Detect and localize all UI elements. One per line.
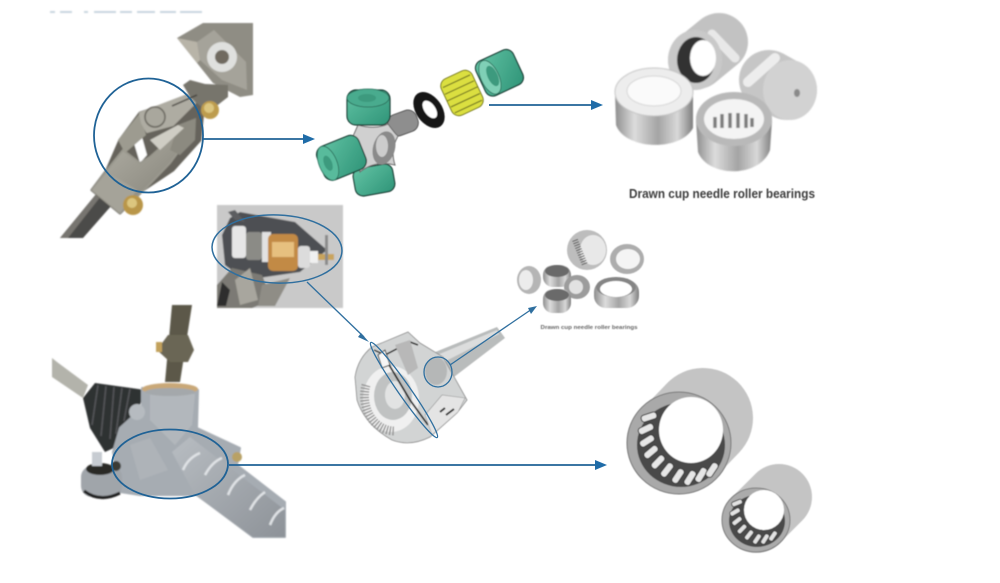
photo: large needle bearing: [627, 392, 731, 494]
photo: small bearing group: [517, 230, 644, 313]
joint silhouette: [92, 97, 203, 213]
housing: [355, 332, 467, 443]
shaft: [423, 327, 505, 380]
bore: [659, 397, 723, 463]
front bearing: [696, 92, 772, 171]
caption: large: Drawn cup needle roller bearings: [629, 187, 815, 201]
diagram: exploded universal joint cross: [313, 47, 526, 197]
callout ellipse: rack housing: [112, 430, 228, 498]
left bearing: [615, 68, 693, 145]
arrow: cross to bearings: [489, 100, 603, 110]
cup body: [679, 418, 703, 443]
tie rod: [52, 358, 88, 398]
yellow needle cage: [438, 68, 486, 118]
left cup: [313, 133, 369, 183]
diagram: hub cutaway bearing: [355, 327, 505, 443]
front ring: [627, 392, 731, 494]
needles: [729, 499, 778, 545]
input shaft: [165, 305, 192, 382]
shaft: [60, 193, 112, 238]
photo: rack and pinion steering gear: [52, 305, 285, 537]
bolts: [201, 101, 219, 119]
needle row: [363, 366, 419, 432]
photo: gearbox cutaway: [217, 205, 343, 308]
arrow: joint to exploded cross: [203, 134, 315, 144]
callout ellipses: hub: [366, 339, 452, 441]
top bearing: [668, 30, 735, 90]
photo: four drawn cup bearings: [615, 30, 817, 171]
callout circle: universal joint: [94, 78, 203, 192]
arrow: gearbox to hub: [307, 282, 369, 342]
bore: [744, 490, 784, 530]
bracket: [177, 23, 253, 97]
right bearing: [748, 58, 817, 120]
arrow: hub to small bearings: [450, 306, 537, 365]
section lines: [374, 342, 418, 355]
arrow: rack to bearings: [229, 460, 607, 470]
rack tube: [172, 437, 285, 537]
housing: [113, 388, 285, 537]
top cup: [347, 89, 390, 125]
far green cup: [473, 47, 526, 99]
bottom cup: [352, 163, 396, 197]
photo: steering column universal joint: [60, 23, 253, 238]
callout ellipse: gearbox: [211, 213, 343, 285]
photo: small needle bearing: [722, 488, 790, 552]
stub: [385, 108, 421, 138]
end bushing: [81, 466, 122, 497]
faint cropped heading: [50, 11, 202, 13]
caption: small: Drawn cup needle roller bearings: [540, 325, 638, 331]
front ring: [722, 488, 790, 552]
centre cross: [347, 124, 398, 172]
black seal ring: [407, 86, 451, 134]
rubber boot: [83, 383, 145, 452]
cup body: [756, 497, 779, 520]
needles: [637, 411, 719, 487]
